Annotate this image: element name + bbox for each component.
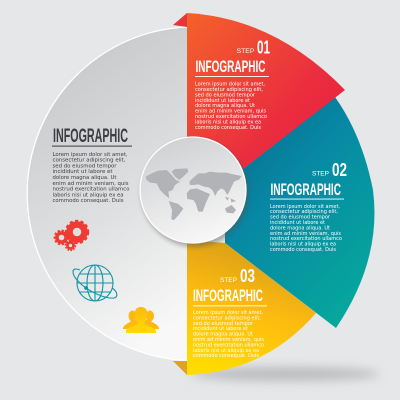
panel: red step 01 <box>173 13 345 187</box>
icon: red gears <box>54 221 88 250</box>
teal step label: 02 <box>332 160 347 180</box>
panel: teal step 02 <box>225 97 374 328</box>
teal step label: STEP <box>312 170 329 178</box>
gray heading: INFOGRAPHIC <box>53 125 128 147</box>
yellow step label: STEP <box>220 277 237 284</box>
yellow text block: Lorem ipsum dolor sit amet, <box>193 310 263 316</box>
gray text block: laboris nisi ut aliquip ex ea <box>52 192 124 198</box>
teal heading: INFOGRAPHIC <box>270 180 341 199</box>
red text block: incididunt ut labore et <box>195 98 250 104</box>
red text block: laboris nisi ut aliquip ex ea <box>195 119 261 125</box>
teal text block: commodo consequat. Duis <box>270 247 336 253</box>
teal text block <box>270 199 344 253</box>
red text block: consectetur adipiscing elit, <box>195 87 263 93</box>
gray text block: dolore magna aliqua. Ut <box>52 175 116 181</box>
red heading: INFOGRAPHIC <box>196 57 266 76</box>
gray text block: sed do eiusmod tempor <box>52 163 117 169</box>
panel: yellow step 03 <box>173 240 316 375</box>
gray text block: Lorem ipsum dolor sit amet, <box>52 152 128 158</box>
gray text block: enim ad minim veniam, quis <box>52 181 129 187</box>
yellow heading: INFOGRAPHIC <box>193 286 263 305</box>
yellow text block: consectetur adipiscing elit, <box>193 315 261 321</box>
teal text block: consectetur adipiscing elit, <box>270 209 338 215</box>
red text block <box>195 76 269 131</box>
teal text block: laboris nisi ut aliquip ex ea <box>270 242 336 248</box>
icon: teal globe <box>73 265 117 301</box>
red text block: enim ad minim veniam, quis <box>195 109 266 115</box>
red step label: 01 <box>257 38 270 58</box>
yellow text block: nostrud exercitation ullamco <box>193 342 264 348</box>
yellow text block <box>193 305 267 359</box>
gray text block: incididunt ut labore et <box>52 169 112 175</box>
gray text block <box>52 146 132 204</box>
teal step label <box>312 160 347 180</box>
red text block: commodo consequat. Duis <box>195 125 261 131</box>
teal text block: dolore magna aliqua. Ut <box>270 225 330 231</box>
gray text block: consectetur adipiscing elit, <box>52 158 126 164</box>
center disc with world map <box>140 137 249 247</box>
teal text block: enim ad minim veniam, quis <box>270 231 341 237</box>
yellow step label <box>220 266 255 286</box>
ground shadow <box>190 367 380 381</box>
yellow text block: laboris nisi ut aliquip ex ea <box>193 348 259 354</box>
red step label: STEP <box>236 48 254 55</box>
yellow text block: dolore magna aliqua. Ut <box>193 332 253 338</box>
yellow text block: enim ad minim veniam, quis <box>193 337 264 343</box>
red text block: dolore magna aliqua. Ut <box>195 103 255 109</box>
yellow step label: 03 <box>240 266 255 286</box>
gray text block: commodo consequat. Duis <box>52 198 124 204</box>
red text block: sed do eiusmod tempor <box>195 92 256 98</box>
teal text block: nostrud exercitation ullamco <box>270 236 342 242</box>
red step label <box>236 38 270 58</box>
red text block: Lorem ipsum dolor sit amet, <box>195 82 265 88</box>
panel: gray left half <box>27 27 187 360</box>
teal text block: Lorem ipsum dolor sit amet, <box>270 204 340 210</box>
yellow text block: commodo consequat. Duis <box>193 353 259 359</box>
teal text block: sed do eiusmod tempor <box>270 215 331 221</box>
world map <box>146 168 242 220</box>
icon: yellow people <box>123 307 159 333</box>
yellow text block: incididunt ut labore et <box>193 326 248 332</box>
red text block: nostrud exercitation ullamco <box>195 114 267 120</box>
yellow text block: sed do eiusmod tempor <box>193 321 254 327</box>
gray text block: nostrud exercitation ullamco <box>52 187 130 193</box>
teal text block: incididunt ut labore et <box>270 220 325 226</box>
